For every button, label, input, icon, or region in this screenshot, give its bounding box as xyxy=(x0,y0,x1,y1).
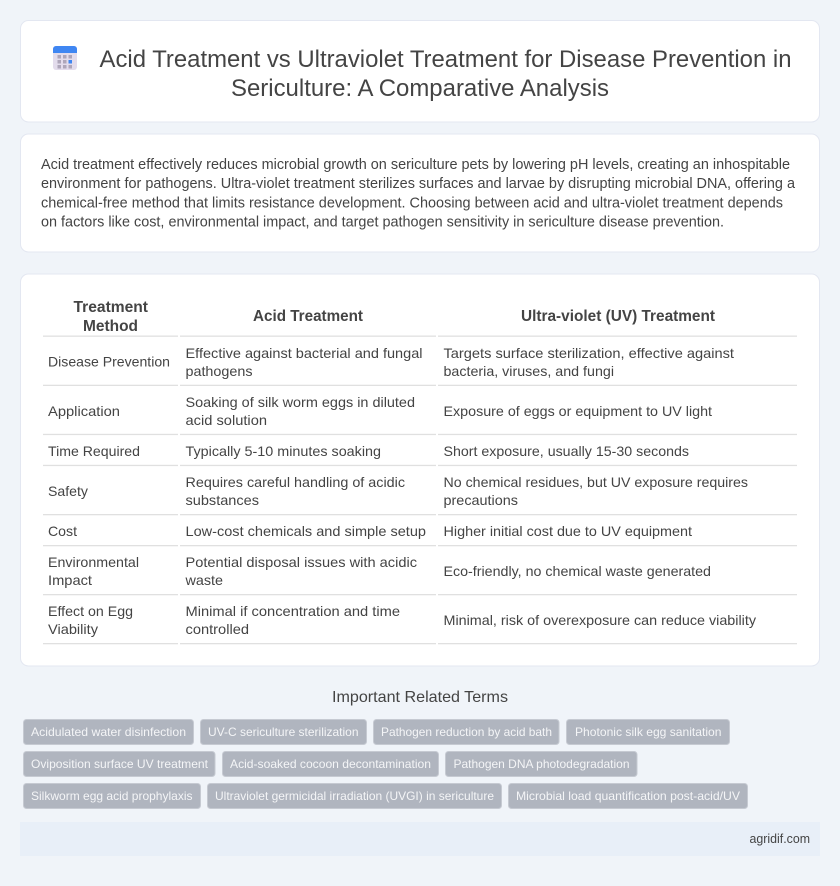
title xyxy=(100,46,792,102)
row: safety: substances xyxy=(186,492,259,508)
chip: Microbial load quantification post-acid/UV xyxy=(516,789,740,803)
footer bar xyxy=(20,822,820,856)
chip: Silkworm egg acid prophylaxis xyxy=(31,789,192,803)
panel: comparison table xyxy=(20,274,820,666)
row: disease prevention: Disease Prevention xyxy=(48,354,170,370)
row: disease prevention: pathogens xyxy=(186,363,252,379)
row: environmental impact: waste xyxy=(184,572,223,588)
summary text: Acid treatment effectively reduces microbial growth on sericulture pets by lowering pH levels, creating an inhospitable xyxy=(41,157,790,173)
summary text: chemical-free method that limits resistance development. Choosing between acid and ultra-violet treatment depends xyxy=(41,196,783,212)
row: environmental impact: Environmental xyxy=(48,554,139,570)
chip xyxy=(24,720,194,744)
chip xyxy=(24,784,200,808)
row: environmental impact: Potential disposal issues with acidic xyxy=(186,554,417,570)
table header: Ultra-violet (UV) Treatment xyxy=(521,308,716,325)
title: Acid Treatment vs Ultraviolet Treatment for Disease Prevention in xyxy=(100,46,792,73)
row: effect on egg viability: Minimal if concentration and time xyxy=(186,603,400,619)
row: safety: precautions xyxy=(444,492,518,508)
chip: Acid-soaked cocoon decontamination xyxy=(230,757,431,771)
chip: UV-C sericulture sterilization xyxy=(208,725,358,739)
row: disease prevention: Targets surface sterilization, effective against xyxy=(444,345,734,361)
row: environmental impact: Impact xyxy=(48,572,92,588)
row: effect on egg viability: Viability xyxy=(48,621,98,637)
chip xyxy=(208,784,502,808)
row: disease prevention xyxy=(48,345,734,379)
row: effect on egg viability: Effect on Egg xyxy=(48,603,133,619)
row: cost xyxy=(48,523,692,539)
row: environmental impact: Eco-friendly, no chemical waste generated xyxy=(444,563,711,579)
chip xyxy=(566,720,730,744)
row: time required: Time Required xyxy=(48,443,140,459)
icon: calendar xyxy=(53,46,77,70)
chip: Ultraviolet germicidal irradiation (UVGI) in sericulture xyxy=(215,789,494,803)
chip: Pathogen reduction by acid bath xyxy=(381,725,552,739)
row: application: Application xyxy=(48,403,120,419)
chip: Oviposition surface UV treatment xyxy=(31,757,209,771)
row: safety: Safety xyxy=(48,483,88,499)
title: Sericulture: A Comparative Analysis xyxy=(231,75,609,102)
panel: title card xyxy=(20,20,820,122)
row: disease prevention: Effective against bacterial and fungal xyxy=(186,345,422,361)
row: effect on egg viability: Minimal, risk of overexposure can reduce viability xyxy=(444,612,756,628)
row: disease prevention: bacteria, viruses, and fungi xyxy=(444,363,614,379)
row: effect on egg viability xyxy=(48,603,756,637)
row: safety: Requires careful handling of acidic xyxy=(186,474,405,490)
row: time required xyxy=(48,443,689,459)
footer bar: agridif.com xyxy=(750,831,810,846)
chip xyxy=(24,752,215,776)
row: application: Soaking of silk worm eggs in diluted xyxy=(186,394,415,410)
chip xyxy=(374,720,559,744)
panel: summary card xyxy=(20,134,820,252)
row: effect on egg viability: controlled xyxy=(186,621,249,637)
summary text: on factors like cost, environmental impact, and target pathogen sensitivity in sericulture disease prevention. xyxy=(41,214,724,230)
row: environmental impact xyxy=(48,554,711,588)
chip xyxy=(446,752,637,776)
chip: Acidulated water disinfection xyxy=(31,725,186,739)
table header: Method xyxy=(83,318,138,335)
table header: Treatment xyxy=(74,299,149,316)
chip xyxy=(222,752,438,776)
chip xyxy=(200,720,366,744)
summary text: environment for pathogens. Ultra-violet treatment sterilizes surfaces and larvae by disrupting microbial DNA, offering a xyxy=(41,176,796,192)
row: cost: Cost xyxy=(48,523,77,539)
row: cost: Low-cost chemicals and simple setup xyxy=(186,523,426,539)
row: time required: Typically 5-10 minutes soaking xyxy=(186,443,381,459)
row: time required: Short exposure, usually 15-30 seconds xyxy=(444,443,689,459)
chip: Photonic silk egg sanitation xyxy=(575,725,722,739)
panel: related term chips xyxy=(24,720,748,808)
row: safety: No chemical residues, but UV exposure requires xyxy=(444,474,748,490)
row: application xyxy=(48,394,712,428)
chip xyxy=(508,784,748,808)
row: safety xyxy=(48,474,748,508)
table header: Acid Treatment xyxy=(253,308,364,325)
row: application: Exposure of eggs or equipment to UV light xyxy=(444,403,712,419)
heading: important related terms: Important Related Terms xyxy=(332,689,508,706)
summary text xyxy=(41,157,796,230)
row: application: acid solution xyxy=(186,412,267,428)
chip: Pathogen DNA photodegradation xyxy=(454,757,630,771)
row: cost: Higher initial cost due to UV equipment xyxy=(444,523,692,539)
table header xyxy=(74,299,716,335)
